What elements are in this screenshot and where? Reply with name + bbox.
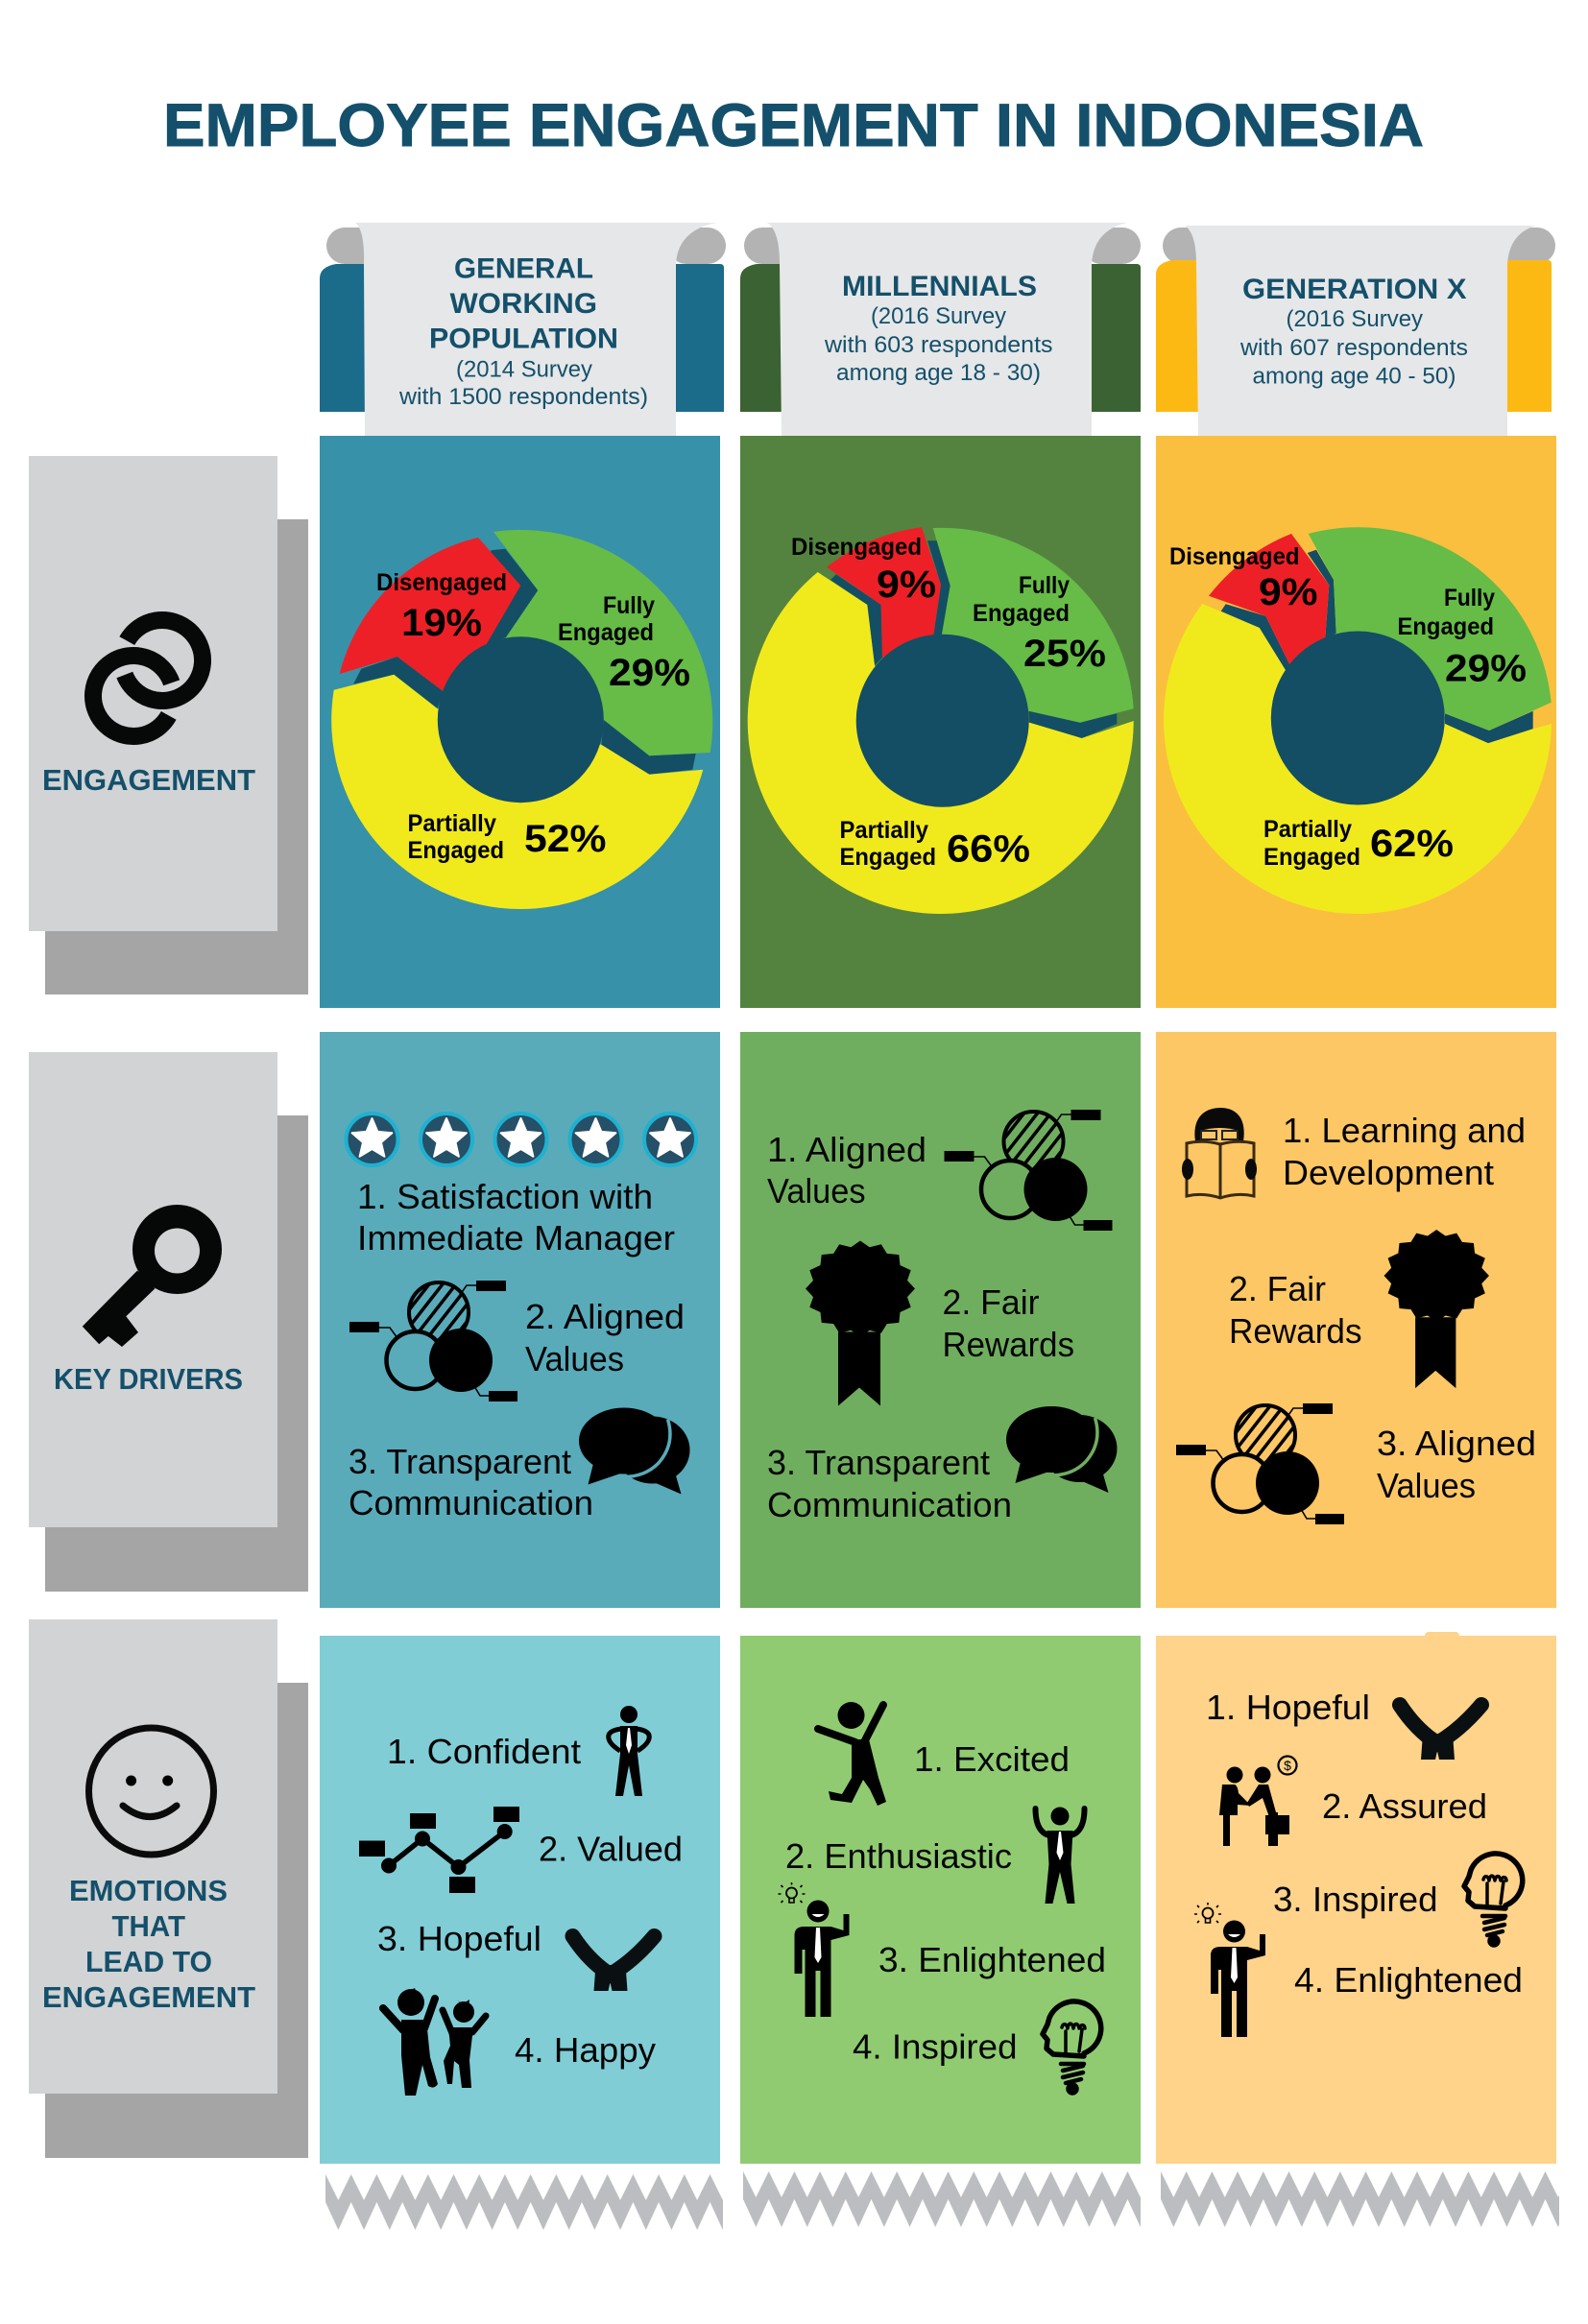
icon: speech bubbles	[579, 1407, 689, 1494]
emotion text: happy: 4. Happy	[515, 2030, 656, 2070]
segment: fully engaged 29%	[1309, 527, 1552, 731]
icon: key	[83, 1205, 222, 1347]
donut chart: general working population: Fully	[603, 592, 655, 619]
donut chart: millennials: Partially	[839, 817, 928, 844]
panel: engagement, general working population	[320, 436, 720, 1008]
driver text: transparent communication: 3. Transparent	[767, 1443, 990, 1482]
icon: idea bulb head	[1043, 2001, 1101, 2093]
donut chart: general working population: 19%	[401, 602, 482, 644]
column header: millennials: MILLENNIALS	[842, 271, 1037, 302]
icon: enlightened person	[778, 1882, 849, 2017]
panel: engagement, generation x	[1156, 436, 1556, 1008]
icon: happy people jumping	[383, 1988, 486, 2096]
donut chart: millennials: 66%	[947, 827, 1030, 870]
icon: venn diagram	[945, 1110, 1112, 1231]
donut chart: generation x: Engaged	[1263, 844, 1360, 871]
driver text: fair rewards: 2. Fair	[1229, 1269, 1326, 1308]
donut chart: generation x: 9%	[1259, 571, 1317, 613]
driver text: learning and development: 1. Learning and	[1283, 1111, 1526, 1150]
emotion text: assured: 2. Assured	[1322, 1786, 1487, 1826]
emotion text: excited: 1. Excited	[914, 1739, 1070, 1779]
segment: fully engaged 29%	[493, 530, 712, 755]
side card: key drivers: KEY DRIVERS	[54, 1362, 243, 1396]
column header: millennials: among age 18 - 30)	[836, 360, 1041, 386]
panel: key drivers, millennials	[740, 1032, 1141, 1608]
side card: emotions: THAT	[111, 1909, 185, 1943]
driver text: transparent communication	[767, 1443, 1012, 1524]
donut chart: generation x	[1164, 527, 1552, 914]
icon: raised arms	[572, 1936, 655, 1991]
panel: emotions, generation x	[1156, 1632, 1556, 2164]
donut chart: general working population: Engaged	[558, 619, 654, 646]
driver text: transparent communication: 3. Transparent	[349, 1442, 571, 1481]
donut chart: general working population: 29%	[609, 652, 690, 694]
icon: rosette badge	[806, 1240, 915, 1405]
panel: emotions, millennials	[740, 1636, 1141, 2164]
torn paper edge: column 3	[1161, 2171, 1559, 2227]
icon: enlightened person	[1194, 1903, 1265, 2037]
driver text: aligned values: Values	[1377, 1466, 1476, 1505]
torn paper edge: column 1	[325, 2174, 723, 2230]
title: EMPLOYEE ENGAGEMENT IN INDONESIA	[163, 92, 1424, 159]
segment: disengaged 9%	[827, 527, 941, 658]
icon: interlocked rings	[93, 620, 203, 736]
column header: millennials	[740, 223, 1141, 436]
donut chart: millennials	[748, 527, 1134, 914]
column header: generation x: (2016 Survey	[1287, 306, 1423, 332]
segment shadows	[353, 549, 696, 775]
driver text: aligned values: 2. Aligned	[525, 1297, 685, 1336]
segment shadows	[830, 540, 1117, 738]
driver text: aligned values: 3. Aligned	[1377, 1424, 1536, 1463]
driver text: aligned values	[1377, 1424, 1536, 1505]
driver text: transparent communication: Communication	[767, 1485, 1012, 1524]
emotion text: hopeful: 1. Hopeful	[1206, 1688, 1370, 1727]
column header: generation x: among age 40 - 50)	[1252, 363, 1456, 390]
icon: person reading a book	[1182, 1108, 1257, 1198]
column header: general working population: WORKING	[449, 288, 597, 320]
icon: line chart	[359, 1807, 519, 1893]
side card: emotions: LEAD TO	[85, 1945, 212, 1978]
donut chart: millennials: 25%	[1023, 633, 1106, 675]
column header: generation x: with 607 respondents	[1239, 335, 1468, 361]
column header: generation x: GENERATION X	[1242, 274, 1467, 305]
segment: disengaged 9%	[1209, 534, 1329, 664]
column header: millennials: (2016 Survey	[871, 303, 1006, 329]
icon: raised arms	[1400, 1705, 1481, 1760]
donut chart: generation x: Disengaged	[1169, 543, 1300, 570]
driver text: satisfaction with immediate manager: 1. Satisfaction with	[357, 1177, 653, 1216]
donut chart: generation x: 62%	[1370, 823, 1454, 865]
column header: general working population: (2014 Survey	[456, 357, 592, 382]
column header: general working population: with 1500 respondents)	[398, 384, 648, 410]
emotion text: valued: 2. Valued	[539, 1830, 683, 1868]
side card: key drivers	[29, 1052, 308, 1592]
driver text: aligned values	[767, 1130, 926, 1210]
emotion text: confident: 1. Confident	[387, 1732, 581, 1771]
side card: emotions: EMOTIONS	[69, 1874, 228, 1907]
driver text: fair rewards	[943, 1282, 1074, 1364]
column header: generation x	[1156, 226, 1555, 436]
driver text: fair rewards: Rewards	[1229, 1311, 1361, 1351]
icon: idea bulb head	[1464, 1854, 1523, 1945]
donut chart: general working population: Disengaged	[376, 569, 507, 596]
donut chart: general working population: 52%	[524, 818, 607, 860]
driver text: transparent communication	[349, 1442, 593, 1522]
emotion text: enthusiastic: 2. Enthusiastic	[785, 1836, 1012, 1876]
donut chart: generation x: Fully	[1444, 585, 1495, 611]
side card: emotions	[29, 1619, 308, 2158]
column header: millennials: with 603 respondents	[824, 332, 1052, 358]
donut chart: millennials: 9%	[877, 563, 936, 606]
icon: jumping person	[818, 1702, 886, 1806]
donut chart: general working population	[331, 530, 712, 909]
donut chart: general working population: Engaged	[407, 837, 504, 864]
segment: partially engaged 66%	[748, 572, 1134, 914]
driver text: learning and development	[1283, 1111, 1526, 1192]
driver text: transparent communication: Communication	[349, 1483, 593, 1522]
donut chart: generation x: Partially	[1263, 816, 1352, 843]
icon: rosette badge	[1384, 1230, 1489, 1388]
side card: emotions: ENGAGEMENT	[42, 1980, 255, 2014]
column header: general working population	[320, 223, 726, 436]
donut chart: generation x: Engaged	[1398, 613, 1494, 640]
icon: five stars	[346, 1114, 696, 1165]
driver text: satisfaction with immediate manager	[357, 1177, 675, 1258]
emotion text: enlightened: 4. Enlightened	[1294, 1960, 1523, 2000]
driver text: fair rewards: 2. Fair	[943, 1282, 1040, 1322]
panel: engagement, millennials	[740, 436, 1141, 1008]
icon: handshake	[1219, 1757, 1296, 1846]
segment: fully engaged 25%	[933, 528, 1134, 723]
column header: general working population: GENERAL	[454, 253, 593, 284]
emotion text: inspired: 3. Inspired	[1273, 1880, 1438, 1919]
driver text: aligned values	[525, 1297, 685, 1378]
driver text: aligned values: Values	[767, 1171, 866, 1210]
driver text: satisfaction with immediate manager: Immediate Manager	[357, 1218, 675, 1258]
panel: emotions, general working population	[320, 1636, 720, 2164]
donut chart: millennials: Engaged	[839, 844, 936, 871]
icon: venn diagram	[1176, 1403, 1344, 1524]
icon: handshake: $	[1284, 1758, 1291, 1773]
driver text: fair rewards	[1229, 1269, 1361, 1351]
emotion text: inspired: 4. Inspired	[853, 2027, 1018, 2066]
side card: engagement: ENGAGEMENT	[42, 763, 255, 797]
side card: engagement	[29, 456, 308, 994]
donut chart: millennials: Fully	[1019, 572, 1070, 599]
driver text: fair rewards: Rewards	[943, 1325, 1074, 1364]
donut chart: generation x: 29%	[1445, 647, 1527, 689]
segment: disengaged 19%	[340, 538, 520, 691]
icon: confident person	[609, 1706, 649, 1796]
driver text: aligned values: Values	[525, 1339, 624, 1378]
driver text: aligned values: 1. Aligned	[767, 1130, 926, 1169]
donut chart: millennials: Engaged	[973, 600, 1070, 627]
driver text: learning and development: Development	[1283, 1153, 1494, 1192]
panel: key drivers, general working population	[320, 1032, 720, 1608]
column header: general working population: POPULATION	[429, 323, 618, 355]
donut chart: millennials: Disengaged	[791, 534, 922, 561]
emotion text: hopeful: 3. Hopeful	[377, 1919, 541, 1958]
donut chart: general working population: Partially	[407, 810, 496, 837]
icon: person with raised arms	[1035, 1807, 1085, 1904]
icon: speech bubbles	[1006, 1406, 1118, 1493]
segment: partially engaged 52%	[331, 675, 703, 909]
icon: venn diagram	[349, 1281, 517, 1402]
panel: key drivers, generation x	[1156, 1032, 1556, 1608]
icon: smiley	[88, 1728, 213, 1855]
segment shadows	[1221, 550, 1533, 743]
segment: partially engaged 62%	[1164, 604, 1552, 914]
torn paper edge: column 2	[743, 2171, 1141, 2227]
emotion text: enlightened: 3. Enlightened	[878, 1940, 1106, 1979]
